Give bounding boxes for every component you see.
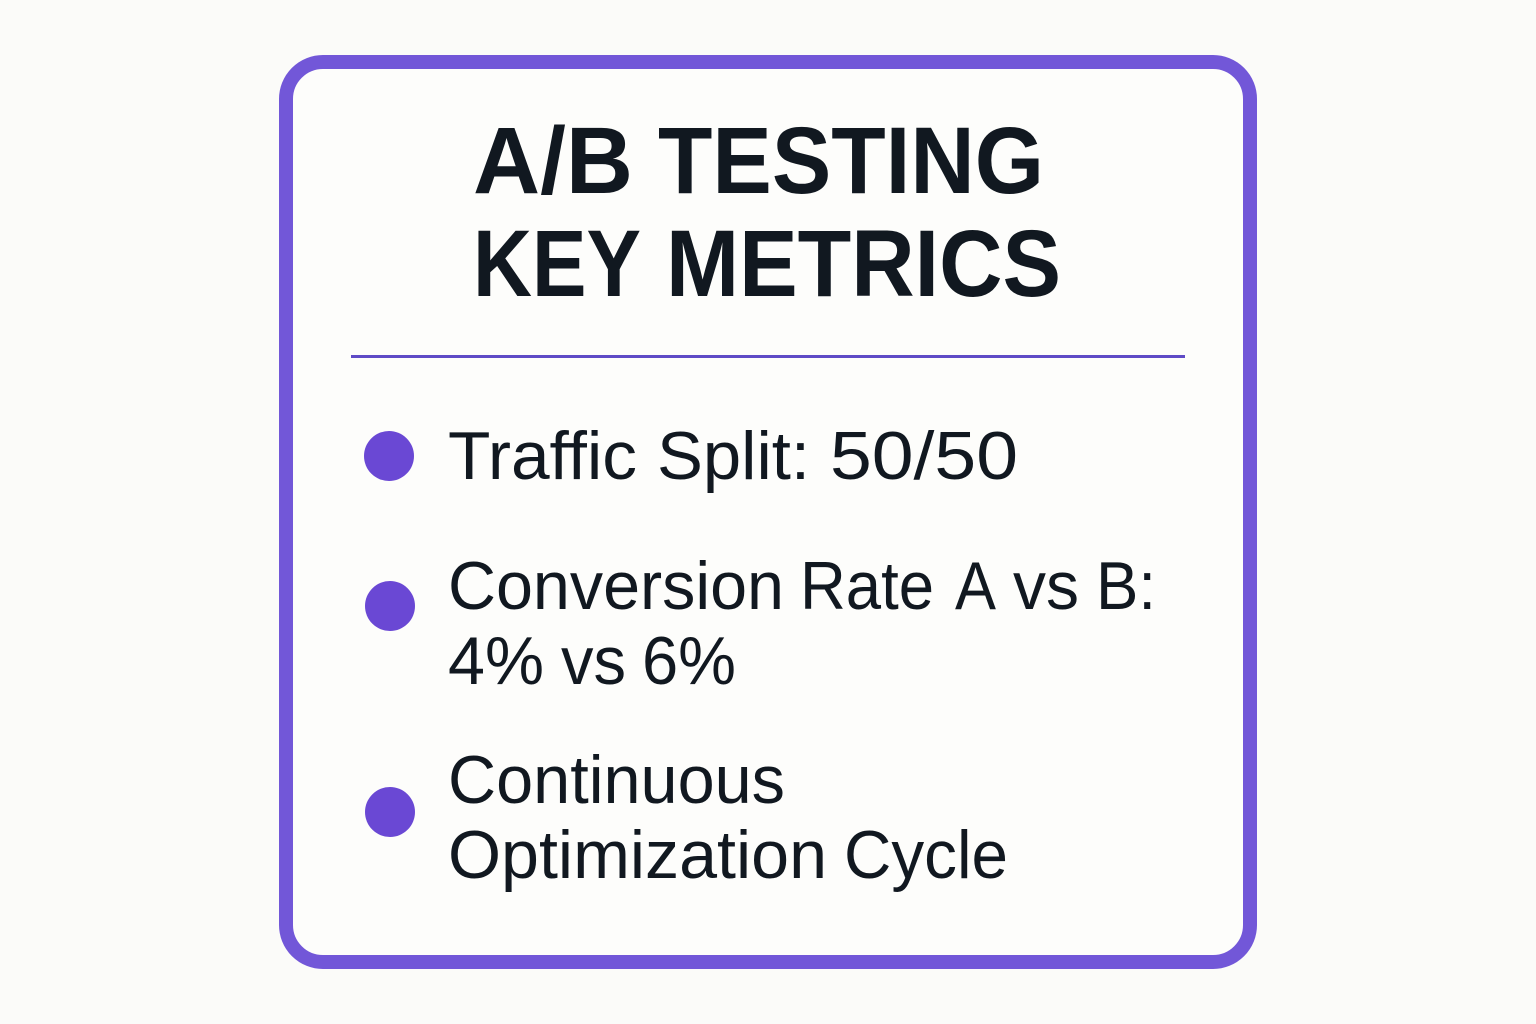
text: traffic split: 50/50 xyxy=(830,418,1018,494)
text: optimization cycle: Cycle xyxy=(844,817,1008,893)
bullet icon: traffic split xyxy=(364,431,414,481)
text: optimization cycle: Continuous xyxy=(448,742,785,818)
title xyxy=(473,108,1061,317)
text: conversion rate: 6% xyxy=(642,623,736,699)
text: traffic split: Split: xyxy=(657,418,810,494)
text: traffic split xyxy=(448,418,1018,494)
text: conversion rate: 4% xyxy=(448,623,544,699)
text: conversion rate xyxy=(448,548,1156,699)
text: conversion rate: Rate xyxy=(800,548,934,624)
title: KEY xyxy=(473,211,641,317)
divider xyxy=(351,355,1185,358)
title: TESTING xyxy=(658,108,1044,214)
text: optimization cycle xyxy=(448,742,1008,893)
text: conversion rate: vs xyxy=(1013,548,1079,624)
bullet icon: optimization cycle xyxy=(365,787,415,837)
text: conversion rate: Conversion xyxy=(448,548,784,624)
title: METRICS xyxy=(666,211,1061,317)
text: optimization cycle: Optimization xyxy=(448,817,827,893)
title: A/B xyxy=(473,108,633,214)
text: conversion rate: A xyxy=(955,548,997,624)
text: traffic split: Traffic xyxy=(448,418,637,494)
panel: metrics card xyxy=(286,62,1250,962)
text: conversion rate: B: xyxy=(1096,548,1156,624)
bullet icon: conversion rate xyxy=(365,581,415,631)
text: conversion rate: vs xyxy=(561,623,626,699)
